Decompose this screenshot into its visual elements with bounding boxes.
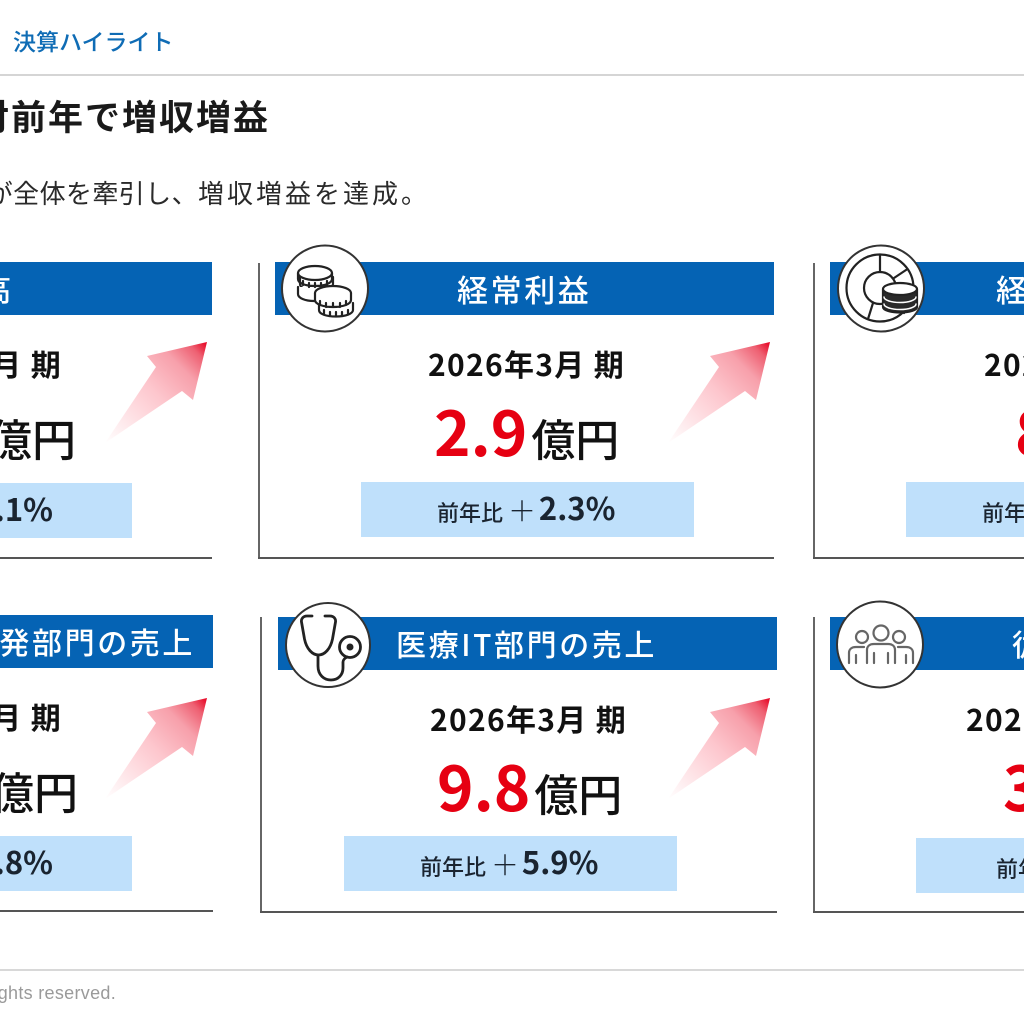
change box: medical IT sales [344, 836, 677, 891]
change box: development sales [0, 836, 132, 891]
value: ordinary profit: 2.9億円 [434, 384, 619, 474]
change box: sales [0, 483, 132, 538]
arrow: ordinary profit up [674, 342, 770, 436]
period: ordinary profit: 2026年3月 期 [428, 341, 625, 385]
header: medical IT sales [278, 617, 777, 670]
arrow: development sales up [111, 698, 207, 792]
arrow: medical IT sales up [674, 698, 770, 792]
icon: coins [281, 244, 369, 332]
period: medical IT sales: 2026年3月 期 [430, 696, 627, 740]
icon: pie chart and coins [837, 244, 925, 332]
icon: stethoscope [285, 602, 371, 688]
value: medical IT sales: 9.8億円 [437, 739, 622, 829]
footer rule and copyright [0, 969, 1024, 971]
panel: development sales [0, 615, 213, 912]
icon detail: chest piece [346, 644, 354, 650]
panel: ordinary profit [258, 262, 774, 559]
header: ordinary margin [830, 262, 1024, 315]
change box: ordinary margin [906, 482, 1024, 537]
subtitle: が全体を牽引し、増収増益を達成。 [0, 174, 430, 211]
arrow: sales up [111, 342, 207, 436]
change box: ordinary profit: 前年比 ＋ 2.3% [437, 484, 615, 530]
header: employees [830, 617, 1024, 670]
panel: medical IT sales [260, 617, 777, 913]
icon: people [836, 600, 924, 688]
change box: medical IT sales: 前年比 ＋ 5.9% [420, 838, 598, 884]
section label: 決算ハイライト [13, 23, 174, 57]
header: ordinary profit: 経常利益 [457, 266, 591, 311]
change box: employees [916, 838, 1024, 893]
header: ordinary profit [275, 262, 774, 315]
header: sales [0, 262, 212, 315]
panel: employees [813, 617, 1024, 913]
header: medical IT sales: 医療IT部門の売上 [396, 621, 657, 665]
panel: ordinary margin [813, 262, 1024, 559]
change box: ordinary profit [361, 482, 694, 537]
panel: sales [0, 262, 212, 559]
